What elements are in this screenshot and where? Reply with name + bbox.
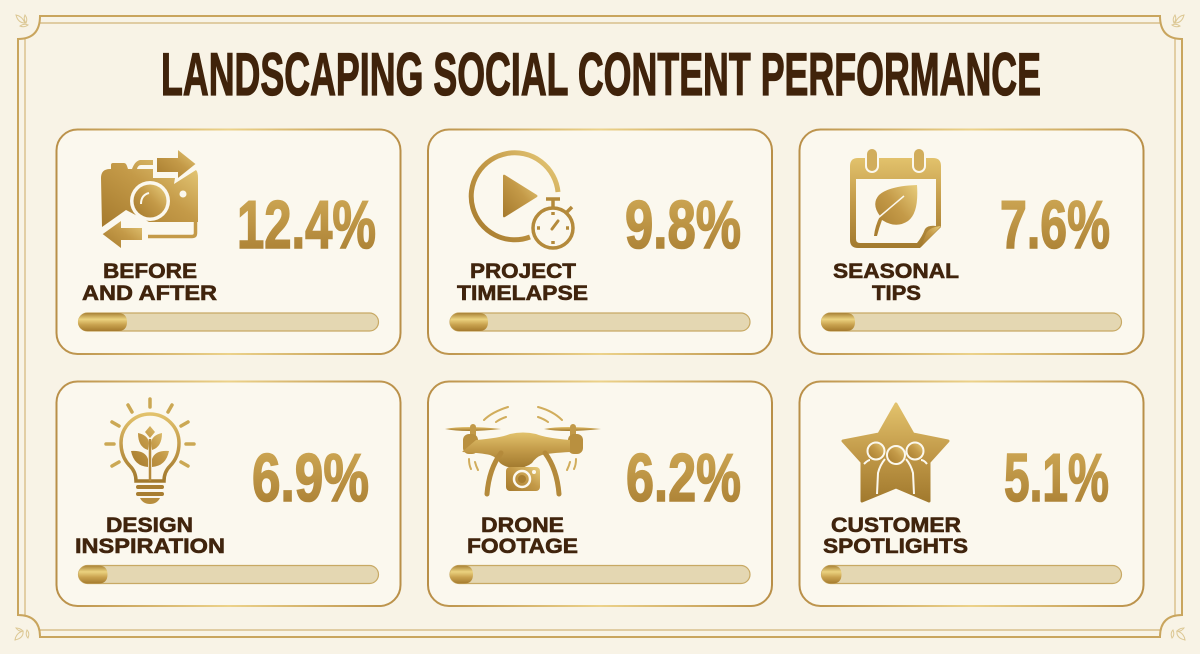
icon: play ring with stopwatch (471, 153, 573, 248)
metric value: 6.9% (252, 440, 369, 516)
label (75, 514, 225, 558)
label: BEFORE (103, 260, 197, 283)
metric value: 7.6% (1000, 187, 1110, 263)
icon: calendar with leaf (850, 148, 941, 248)
progress bar (78, 566, 378, 584)
metric value: 5.1% (1004, 440, 1109, 516)
panel: drone footage (428, 382, 772, 606)
metric value: 12.4% (237, 187, 376, 263)
panel: before and after (56, 130, 400, 354)
panel: seasonal tips (800, 130, 1144, 354)
progress bar (822, 566, 1122, 584)
label: DESIGN (106, 514, 193, 537)
metric value: 9.8% (625, 187, 741, 263)
label: INSPIRATION (75, 535, 225, 558)
label (457, 260, 588, 305)
panel: customer spotlights (800, 382, 1144, 606)
panel: design inspiration (56, 382, 400, 606)
progress bar (450, 313, 750, 331)
label: SEASONAL (833, 260, 959, 283)
metric value: 6.2% (626, 440, 741, 516)
label: TIMELAPSE (457, 282, 588, 305)
progress bar (78, 313, 378, 331)
icon: camera with arrows (101, 148, 198, 250)
label: PROJECT (470, 260, 576, 283)
label: CUSTOMER (831, 514, 961, 537)
label (833, 260, 959, 305)
label: AND AFTER (82, 282, 217, 305)
progress bar (450, 566, 750, 584)
label (467, 514, 578, 558)
label: SPOTLIGHTS (823, 535, 968, 558)
icon: drone with camera (445, 407, 601, 494)
label (823, 514, 968, 558)
icon: light bulb with plant (106, 399, 194, 504)
label: FOOTAGE (467, 535, 578, 558)
panel: project timelapse (428, 130, 772, 354)
progress bar (821, 313, 1122, 331)
label: TIPS (872, 282, 921, 305)
label: DRONE (481, 514, 564, 537)
icon: star with people (843, 404, 948, 501)
label (82, 260, 217, 305)
